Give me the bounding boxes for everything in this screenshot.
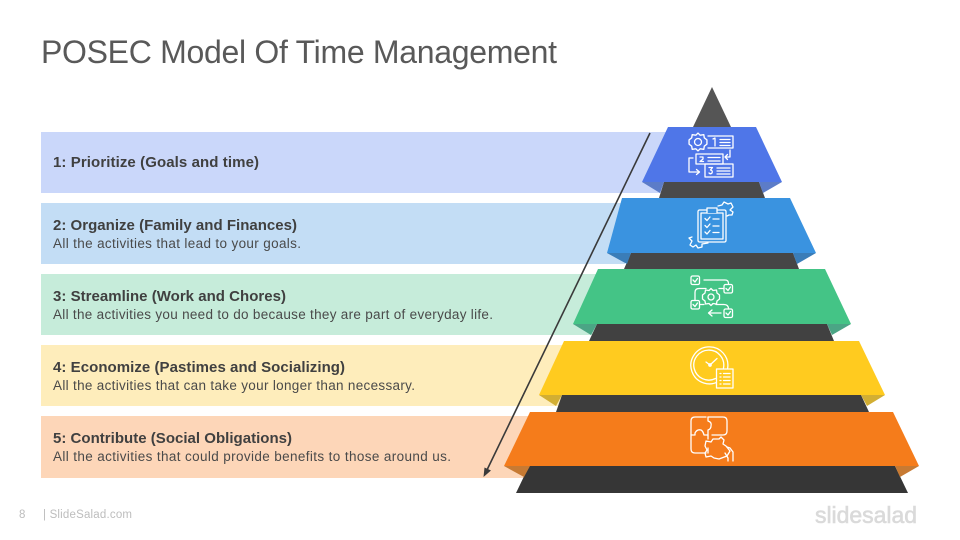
dark tiers [516, 182, 908, 493]
bar 5: contribute [41, 416, 532, 478]
arrow: sequence downward [484, 133, 650, 477]
icon: workflow with gear [691, 276, 732, 318]
pyramid [504, 87, 919, 493]
bar 2: organize: 2: Organize (Family and Finances) [53, 217, 297, 234]
bar 4: economize: 4: Economize (Pastimes and Socializing) [53, 359, 345, 376]
band 2: blue [607, 198, 816, 253]
bar 3: streamline: All the activities you need to do because they are part of everyday life. [53, 307, 493, 322]
bar 3: streamline: 3: Streamline (Work and Chores) [53, 288, 286, 305]
title: POSEC Model Of Time Management [41, 34, 557, 70]
icon: prioritized list with gear [689, 133, 733, 177]
band 4: yellow [539, 341, 885, 395]
band 3: green [573, 269, 851, 324]
logo: slidesalad: slidesalad [815, 502, 917, 528]
bar 1: prioritize [41, 132, 670, 193]
footer: site name: | SlideSalad.com [43, 509, 132, 521]
bar 1: prioritize: 1: Prioritize (Goals and time) [53, 154, 259, 171]
band 1: blue-violet [642, 127, 782, 182]
pyramid apex [693, 87, 731, 127]
band 5: orange [504, 412, 919, 466]
bar 2: organize: All the activities that lead to your goals. [53, 236, 301, 251]
icon: clock with document [691, 347, 733, 388]
icon: puzzle and hand [691, 417, 733, 461]
bar 4: economize: All the activities that can take your longer than necessary. [53, 378, 415, 393]
bar 3: streamline [41, 274, 600, 335]
bar 4: economize [41, 345, 566, 406]
icon: clipboard checklist with gears [689, 202, 733, 248]
bar 5: contribute: All the activities that could provide benefits to those around us. [53, 449, 451, 464]
footer: page number: 8 [19, 509, 25, 521]
bar 2: organize [41, 203, 625, 264]
bar 5: contribute: 5: Contribute (Social Obligations) [53, 430, 292, 447]
panel: text bars [41, 132, 670, 478]
band folds [504, 182, 919, 477]
